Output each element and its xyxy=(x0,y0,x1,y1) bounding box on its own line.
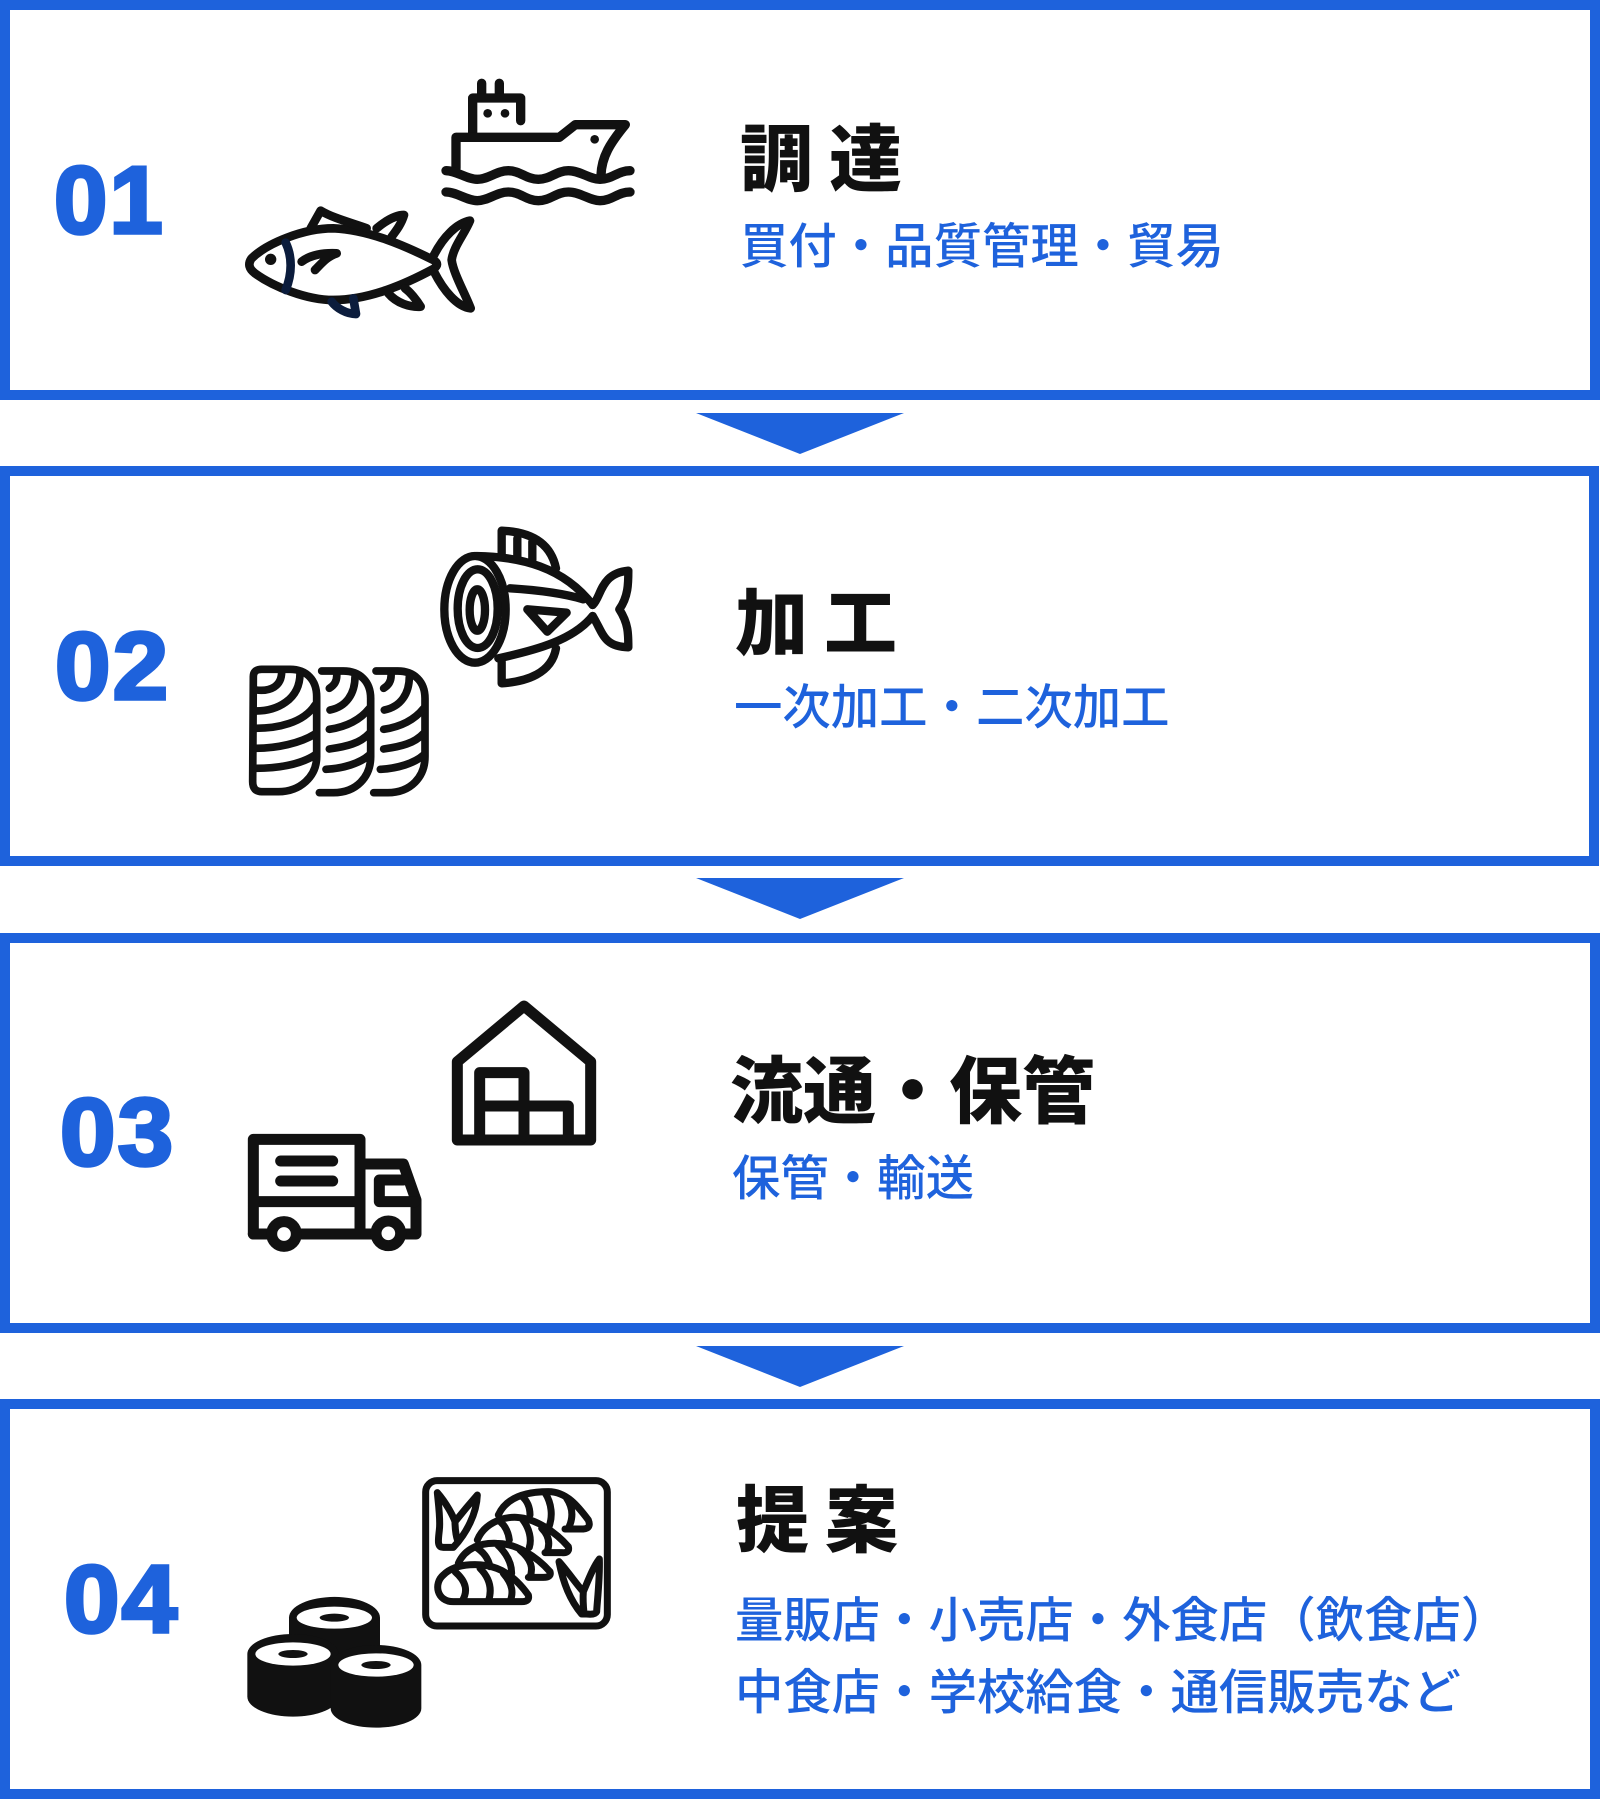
subheading: two-line channel list xyxy=(735,1581,1509,1723)
icon: tuna xyxy=(249,211,471,314)
panel: step 03 distribution and storage xyxy=(0,933,1600,1333)
number 01: 01 xyxy=(54,147,165,254)
number 04: 04 xyxy=(64,1546,179,1653)
icon: ship on waves xyxy=(446,83,630,201)
heading: 流通・保管 xyxy=(730,1033,1095,1139)
panel: step 04 proposal xyxy=(0,1399,1600,1799)
number 02: 02 xyxy=(55,613,170,720)
panel: step 01 procurement xyxy=(0,0,1600,400)
arrow 3 xyxy=(696,1346,904,1387)
icon: cut tuna xyxy=(444,531,628,683)
icon: sushi rolls xyxy=(247,1597,421,1728)
heading: 提案 xyxy=(736,1462,914,1568)
icon: warehouse xyxy=(457,1006,591,1140)
icon: truck xyxy=(253,1139,416,1246)
subheading: two-line channel list: 量販店・小売店・外食店（飲食店） xyxy=(735,1581,1509,1651)
heading: 調達 xyxy=(740,101,918,207)
subheading: 買付・品質管理・貿易 xyxy=(740,207,1224,277)
subheading: two-line channel list: 中食店・学校給食・通信販売など xyxy=(735,1653,1461,1723)
heading: 加工 xyxy=(735,565,913,671)
arrow 1 xyxy=(696,413,904,454)
icon: sashimi slices xyxy=(253,669,425,793)
subheading: 一次加工・二次加工 xyxy=(734,668,1170,738)
number 03: 03 xyxy=(60,1079,175,1186)
subheading: 保管・輸送 xyxy=(732,1139,974,1209)
icon: sashimi tray xyxy=(426,1481,607,1626)
arrow 2 xyxy=(696,878,904,919)
panel: step 02 processing xyxy=(0,466,1599,866)
